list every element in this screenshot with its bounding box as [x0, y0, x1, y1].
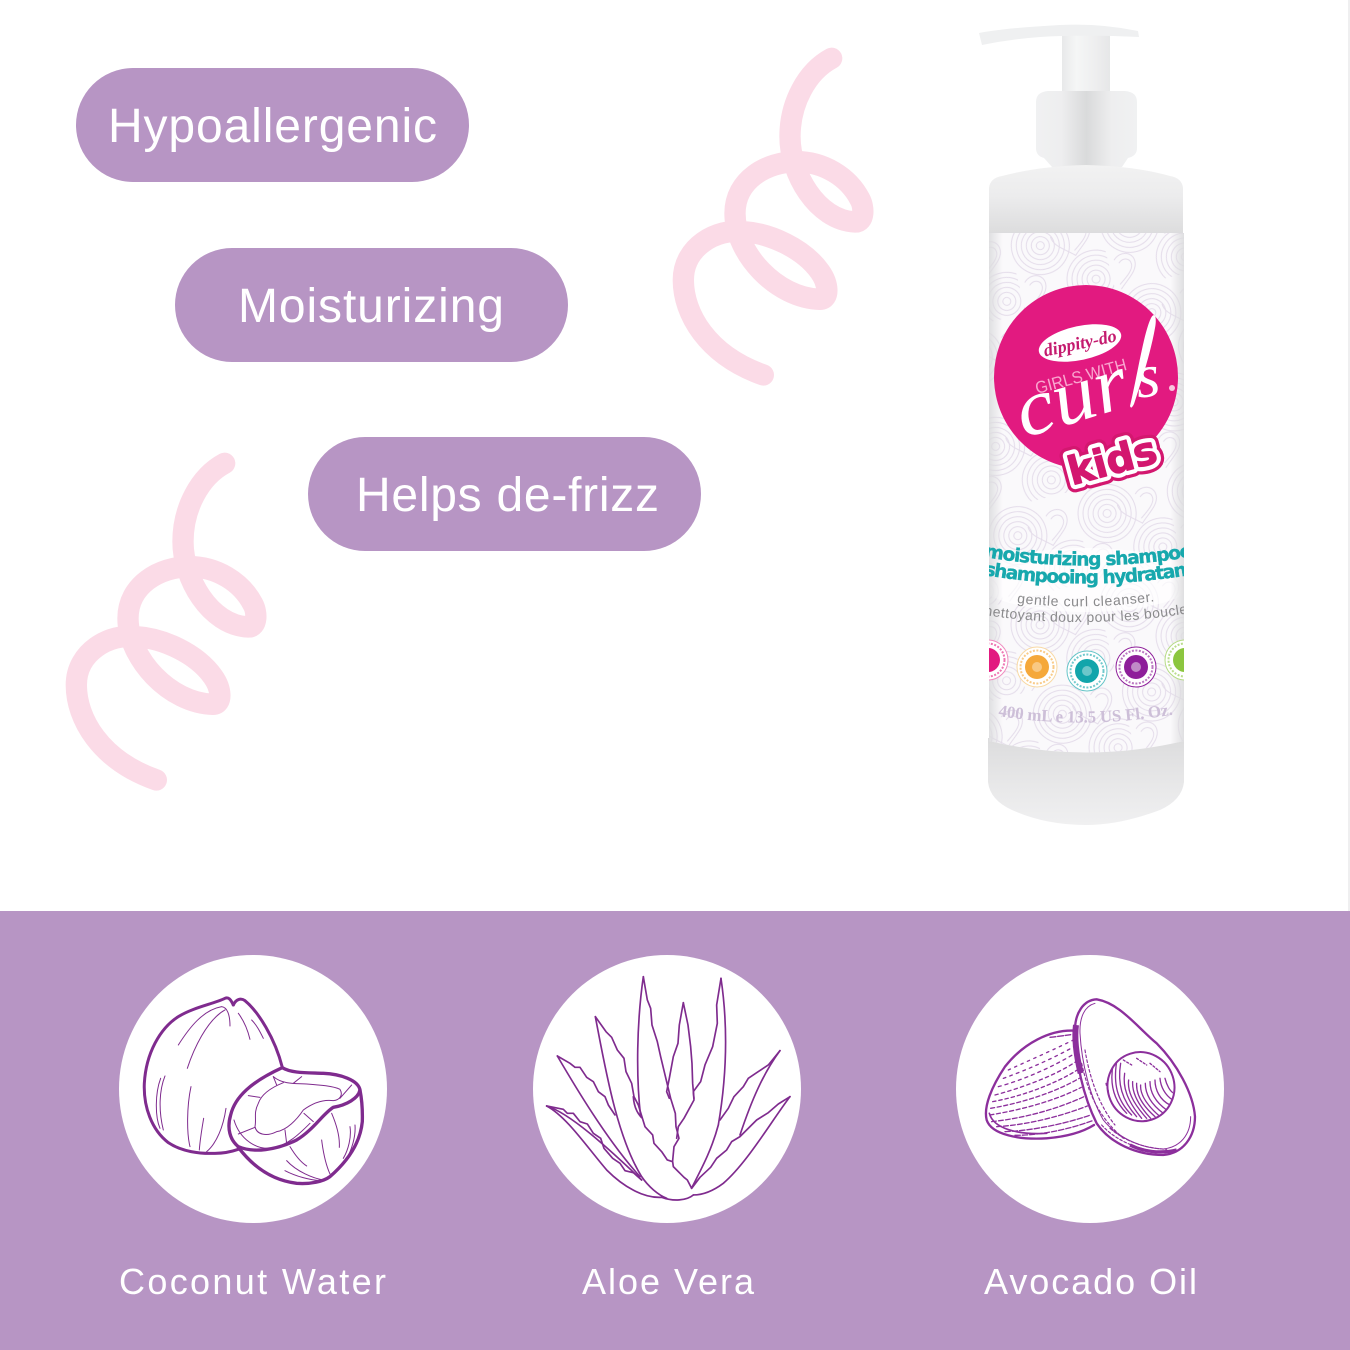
benefit pill: Hypoallergenic	[76, 68, 469, 182]
pump collar	[1036, 91, 1137, 167]
pump stem	[1062, 30, 1110, 94]
kids badge: kids	[1063, 428, 1162, 495]
product description: gentle curl cleanser.	[1018, 594, 1154, 606]
icon: coconut	[144, 998, 362, 1184]
decorative curl: upper right	[683, 58, 863, 375]
volume text: 400 mL e 13.5 US Fl. Oz.	[998, 706, 1172, 723]
benefit pill: Helps de-frizz: Helps de-frizz	[356, 469, 659, 522]
benefit pill: Moisturizing	[175, 248, 568, 362]
curls dot	[1169, 385, 1175, 391]
product: shampoo bottle	[979, 24, 1184, 825]
label: Coconut Water	[119, 1261, 386, 1302]
white circle	[119, 955, 387, 1223]
curls letter l	[1130, 315, 1156, 408]
kids badge: kids	[1063, 428, 1162, 495]
icon: aloe plant	[547, 977, 790, 1200]
bottle base	[988, 738, 1184, 825]
pump head	[979, 25, 1139, 45]
label: Aloe Vera	[582, 1261, 755, 1302]
right edge hairline	[1348, 0, 1350, 911]
product description	[989, 594, 1184, 625]
icon: avocado	[986, 999, 1195, 1155]
white circle	[956, 955, 1224, 1223]
bottom ingredients band	[0, 911, 1350, 1350]
product description: nettoyant doux pour les boucles	[989, 604, 1184, 625]
ingredient: avocado oil	[956, 955, 1224, 1302]
kids badge: kids	[1063, 428, 1162, 495]
product name	[984, 557, 1190, 566]
ingredient: coconut water	[119, 955, 387, 1302]
bottle shoulder	[989, 165, 1183, 234]
ingredient: aloe vera	[533, 955, 801, 1302]
GIRLS WITH text: GIRLS WITH	[1033, 355, 1129, 398]
curls letter s: s	[1130, 341, 1164, 412]
curls script: cur	[1004, 337, 1139, 455]
label: Avocado Oil	[984, 1261, 1197, 1302]
dippity-do logo: dippity-do	[1042, 326, 1118, 360]
bottle label	[989, 233, 1184, 752]
avocado flesh rim texture	[1082, 1050, 1167, 1152]
avocado seed	[1099, 1043, 1183, 1130]
avocado skin texture	[990, 1035, 1093, 1135]
benefit pill: Moisturizing: Moisturizing	[238, 280, 504, 333]
decorative curl: lower left	[76, 463, 256, 780]
benefit badges	[989, 640, 1184, 692]
pink brand circle	[994, 285, 1178, 469]
benefit pill: Hypoallergenic: Hypoallergenic	[108, 100, 437, 153]
bottle label: moisturizing shampoo	[989, 547, 1184, 570]
white circle	[533, 955, 801, 1223]
benefit pill: Helps de-frizz	[308, 437, 701, 551]
